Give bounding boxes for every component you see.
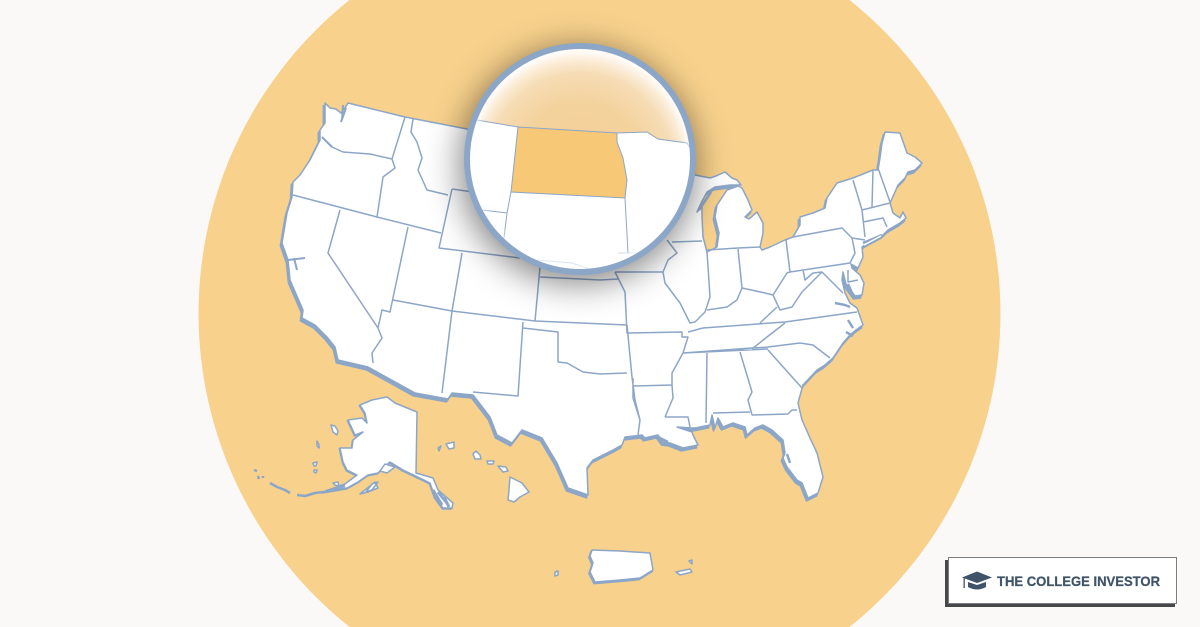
North Dakota highlighted — [511, 127, 627, 198]
Hawaii — [438, 442, 529, 502]
logo box — [948, 558, 1176, 604]
lower 48 states — [282, 103, 922, 498]
lens ring — [467, 46, 693, 272]
US map — [254, 103, 922, 584]
background circle — [199, 0, 1000, 627]
gulf and bay details — [658, 192, 882, 463]
logo shadow — [945, 560, 1175, 607]
magnifying lens — [464, 43, 696, 275]
Alaska islands — [313, 425, 395, 494]
Long Island — [864, 236, 881, 245]
logo badge — [945, 558, 1176, 607]
icon: graduation cap — [962, 572, 992, 590]
Aleutian chain — [254, 470, 345, 496]
logo text: THE COLLEGE INVESTOR — [997, 573, 1160, 589]
lens contents — [470, 49, 690, 269]
lens shadow — [460, 48, 696, 284]
Alaska — [254, 397, 453, 508]
Puerto Rico — [555, 550, 692, 582]
map drop edge — [280, 106, 920, 584]
